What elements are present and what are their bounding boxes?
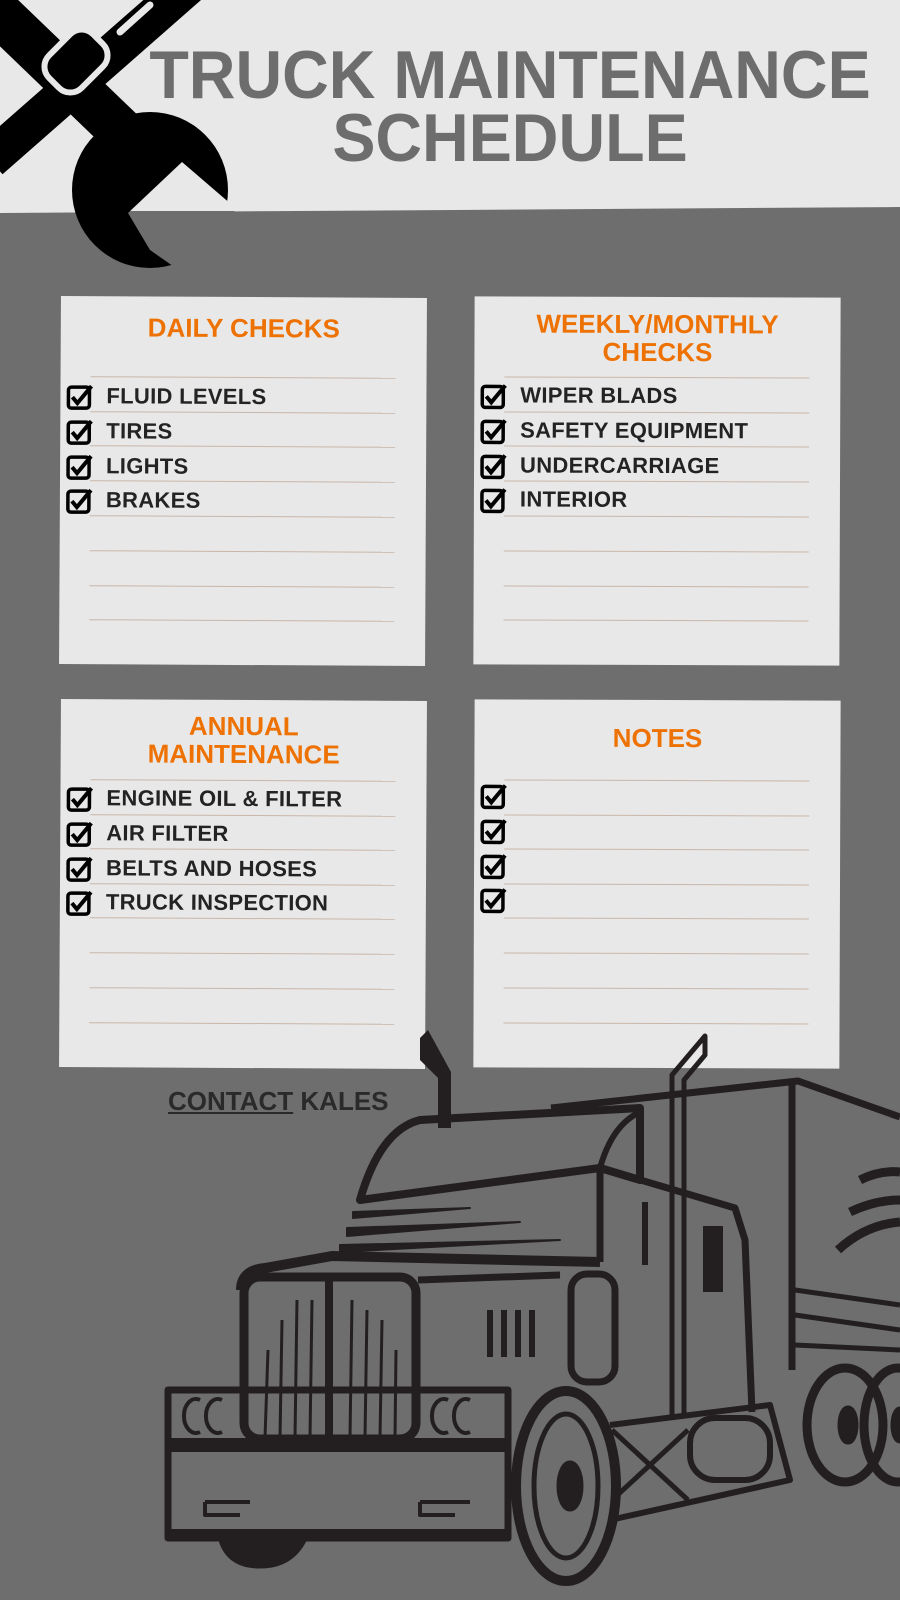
title: TRUCK MAINTENANCE bbox=[149, 37, 871, 113]
title: SCHEDULE bbox=[332, 100, 688, 176]
item list: LIGHTS bbox=[106, 453, 189, 479]
item list: ENGINE OIL & FILTER bbox=[106, 785, 342, 812]
stripes bbox=[340, 1208, 560, 1252]
bumper bbox=[168, 1390, 508, 1538]
item list: TIRES bbox=[106, 418, 173, 444]
panel: notes bbox=[473, 699, 841, 1069]
panel: weekly/monthly checks bbox=[473, 296, 841, 666]
grille bbox=[244, 1277, 416, 1439]
item list bbox=[66, 383, 267, 514]
item list: INTERIOR bbox=[520, 487, 627, 512]
heading: annual: ANNUAL bbox=[189, 711, 299, 741]
cab bbox=[360, 1108, 640, 1200]
contact text: CONTACT KALES bbox=[168, 1086, 389, 1116]
item list: BRAKES bbox=[106, 487, 201, 513]
item list: TRUCK INSPECTION bbox=[106, 889, 328, 915]
heading: daily: DAILY CHECKS bbox=[148, 312, 340, 344]
chassis bbox=[610, 1405, 790, 1520]
heading: weekly: WEEKLY/MONTHLY bbox=[536, 309, 779, 339]
heading: weekly: CHECKS bbox=[602, 337, 712, 367]
item list bbox=[66, 785, 342, 916]
item list: FLUID LEVELS bbox=[106, 383, 267, 409]
hood bbox=[241, 1256, 600, 1290]
stacks bbox=[420, 1030, 451, 1128]
window & vents bbox=[571, 1274, 615, 1382]
item list: AIR FILTER bbox=[106, 820, 229, 846]
item list: SAFETY EQUIPMENT bbox=[520, 418, 748, 443]
item list: WIPER BLADS bbox=[520, 383, 678, 408]
panel: daily checks bbox=[59, 296, 427, 666]
illustration: truck bbox=[164, 1030, 900, 1586]
rear wheels bbox=[807, 1368, 883, 1482]
front wheel bbox=[516, 1391, 616, 1581]
panel: annual maintenance bbox=[59, 699, 427, 1069]
item list: UNDERCARRIAGE bbox=[520, 453, 720, 478]
heading: notes: NOTES bbox=[613, 723, 702, 753]
heading: annual bbox=[148, 711, 340, 770]
title bbox=[149, 37, 871, 176]
item list bbox=[480, 383, 748, 514]
heading: weekly bbox=[536, 309, 779, 367]
header band bbox=[0, 0, 900, 213]
heading: annual: MAINTENANCE bbox=[148, 738, 340, 770]
trailer bbox=[551, 1081, 900, 1117]
item list: BELTS AND HOSES bbox=[106, 855, 317, 881]
empty checkboxes bbox=[480, 784, 507, 914]
icon: crossed tools bbox=[0, 0, 234, 268]
